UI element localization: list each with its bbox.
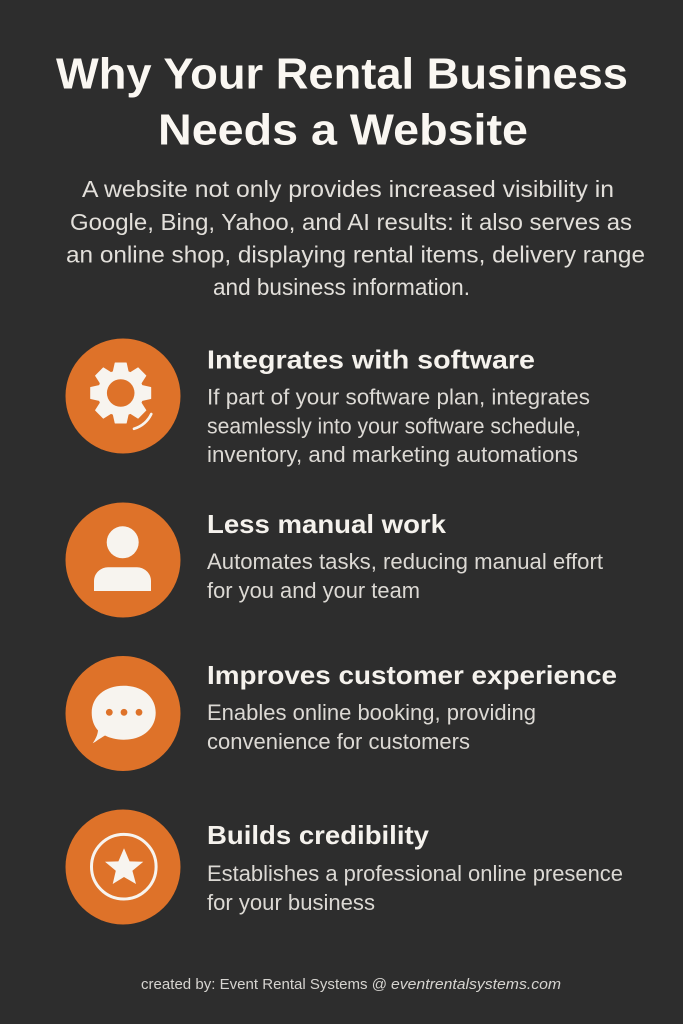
panel: builds credibility bbox=[66, 810, 623, 924]
description bbox=[207, 700, 536, 754]
description: inventory, and marketing automations bbox=[207, 442, 578, 467]
description: convenience for customers bbox=[207, 729, 470, 754]
description bbox=[207, 861, 623, 915]
icon: person bbox=[66, 502, 180, 618]
title: Needs a Website bbox=[158, 106, 528, 154]
intro paragraph: Google, Bing, Yahoo, and AI results: it also serves as bbox=[70, 209, 632, 235]
footer credit: created by: Event Rental Systems @ bbox=[141, 977, 387, 993]
panel: improves customer experience bbox=[66, 656, 617, 771]
panel: less manual work bbox=[66, 502, 604, 618]
footer credit bbox=[141, 977, 561, 993]
heading: Improves customer experience bbox=[207, 662, 617, 690]
panel: integrates with software bbox=[66, 338, 590, 467]
description bbox=[207, 384, 590, 467]
description: Enables online booking, providing bbox=[207, 700, 536, 725]
description: seamlessly into your software schedule, bbox=[207, 413, 581, 438]
description: If part of your software plan, integrates bbox=[207, 384, 590, 410]
description: Establishes a professional online presence bbox=[207, 861, 623, 886]
intro paragraph: an online shop, displaying rental items, delivery range bbox=[66, 242, 645, 268]
icon: speech bubble bbox=[66, 656, 180, 771]
description: for you and your team bbox=[207, 578, 420, 603]
heading: Builds credibility bbox=[207, 822, 430, 850]
description: Automates tasks, reducing manual effort bbox=[207, 549, 604, 574]
title bbox=[56, 50, 628, 154]
intro paragraph: A website not only provides increased visibility in bbox=[82, 176, 614, 202]
footer credit: eventrentalsystems.com bbox=[391, 977, 561, 993]
description bbox=[207, 549, 604, 603]
icon: gear bbox=[66, 338, 180, 454]
heading: Less manual work bbox=[207, 511, 447, 539]
intro paragraph bbox=[66, 176, 645, 300]
icon: star badge bbox=[66, 810, 180, 924]
intro paragraph: and business information. bbox=[213, 274, 470, 300]
heading: Integrates with software bbox=[207, 346, 535, 374]
title: Why Your Rental Business bbox=[56, 50, 628, 98]
description: for your business bbox=[207, 890, 375, 915]
